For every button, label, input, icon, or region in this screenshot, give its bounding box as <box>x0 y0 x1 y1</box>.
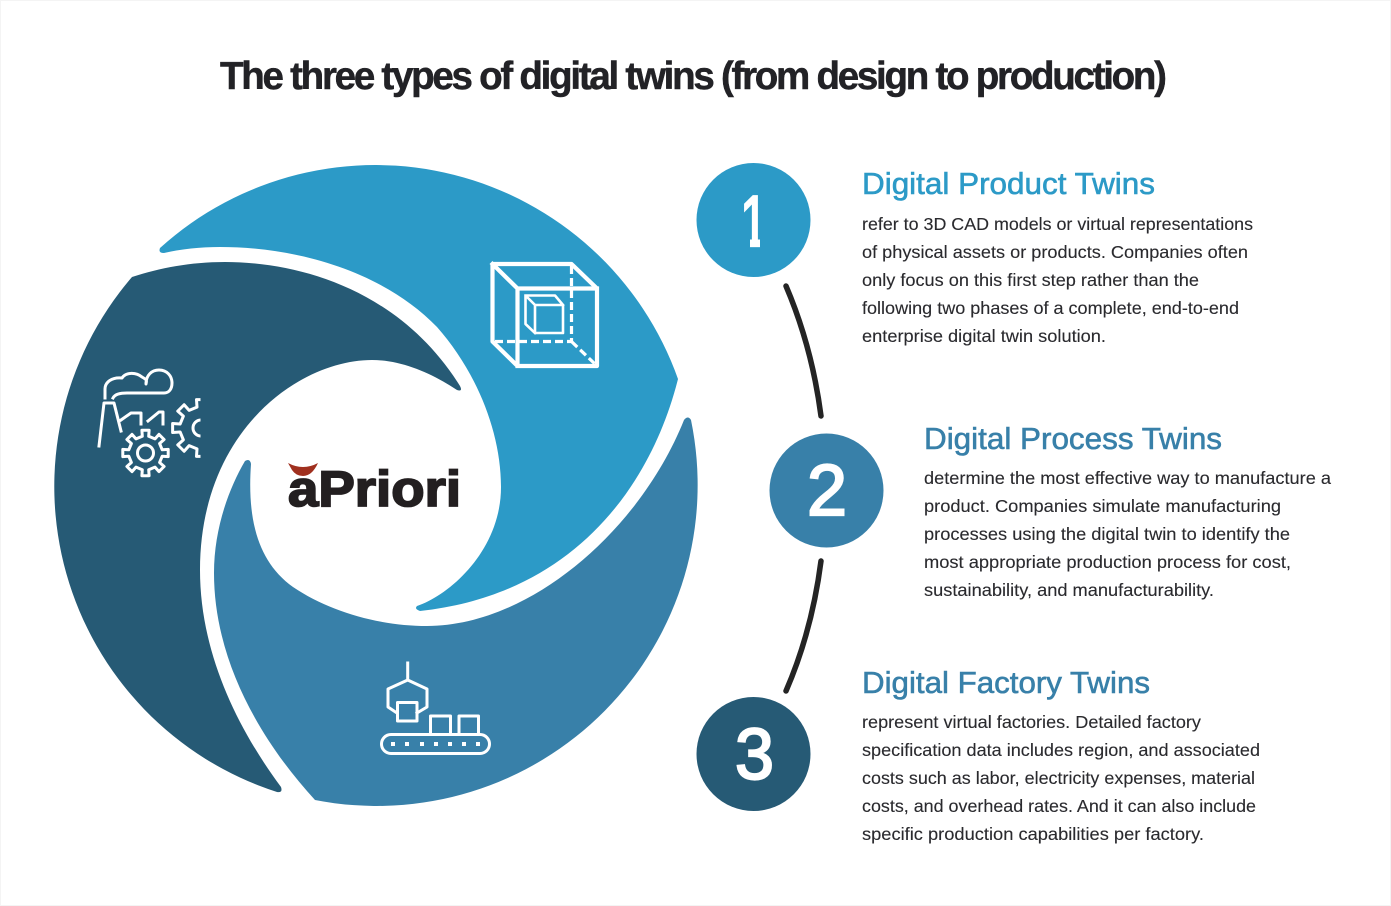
body <box>924 468 1331 600</box>
body: determine the most effective way to manufacture a <box>924 468 1331 488</box>
body: enterprise digital twin solution. <box>862 326 1106 346</box>
body: costs such as labor, electricity expenses, material <box>862 768 1255 788</box>
body: processes using the digital twin to identify the <box>924 524 1290 544</box>
body: product. Companies simulate manufacturing <box>924 496 1281 516</box>
body <box>862 712 1260 844</box>
body: following two phases of a complete, end-to-end <box>862 298 1239 318</box>
logo: aPriori <box>288 461 461 517</box>
body: specific production capabilities per factory. <box>862 824 1204 844</box>
logo swoosh <box>288 463 318 476</box>
body: most appropriate production process for cost, <box>924 552 1291 572</box>
icon: factory with gears <box>97 368 200 478</box>
segment: digital product twin (light blue) <box>160 165 678 611</box>
body: represent virtual factories. Detailed factory <box>862 712 1201 732</box>
body <box>862 214 1253 346</box>
heading: Digital Product Twins <box>862 166 1155 201</box>
badge 2 <box>770 434 884 548</box>
body: costs, and overhead rates. And it can also include <box>862 796 1256 816</box>
numbered timeline <box>696 163 884 811</box>
connector 2 to 3 <box>786 561 821 691</box>
body: refer to 3D CAD models or virtual representations <box>862 214 1253 234</box>
segment: digital process twin (mid blue) <box>214 418 698 806</box>
badge 3 <box>696 697 810 811</box>
heading: Digital Factory Twins <box>862 665 1150 700</box>
body: only focus on this first step rather than the <box>862 270 1199 290</box>
body: specification data includes region, and associated <box>862 740 1260 760</box>
logo wordmark: aPriori <box>288 461 461 517</box>
connector 1 to 2 <box>786 286 821 416</box>
text block: digital product twins <box>862 166 1253 346</box>
heading: Digital Process Twins <box>924 421 1222 456</box>
badge 2: 2 <box>807 451 847 531</box>
text block: digital process twins <box>924 421 1331 600</box>
icon: cube within a cube <box>492 264 597 366</box>
body: sustainability, and manufacturability. <box>924 580 1214 600</box>
badge 1 <box>696 163 810 277</box>
badge 1: 1 <box>740 182 768 262</box>
body: of physical assets or products. Companies often <box>862 242 1248 262</box>
icon: conveyor belt with robotic claw <box>382 663 490 754</box>
segment: digital factory twin (dark blue) <box>54 262 461 792</box>
badge 3: 3 <box>735 715 774 795</box>
title: The three types of digital twins (from design to production) <box>220 55 1167 98</box>
text block: digital factory twins <box>862 665 1260 844</box>
swirl diagram <box>54 165 698 806</box>
